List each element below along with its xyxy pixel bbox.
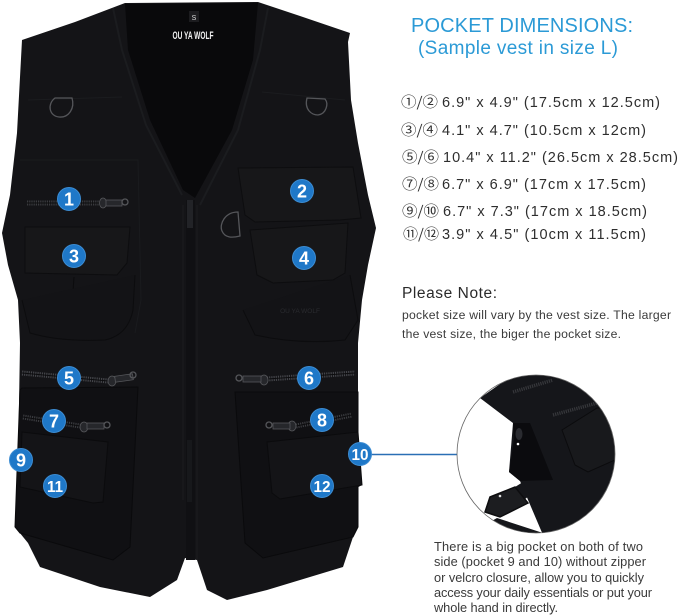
flap pocket 3 (25, 227, 130, 275)
side pocket description: There is a big pocket on both of two (434, 539, 643, 554)
size tag (189, 11, 199, 22)
zipper 6 (236, 373, 355, 385)
badge 8: 8 (317, 410, 327, 430)
row 5/6: ⑤/⑥ (402, 147, 439, 167)
inset zippers (513, 380, 597, 415)
note text: pocket size will vary by the vest size. The larger (402, 308, 671, 322)
row 3/4: 4.1" x 4.7" (10.5cm x 12cm) (442, 123, 646, 139)
flap pocket 12 (267, 432, 362, 499)
flap pocket 4 (250, 223, 348, 283)
row 1/2 (401, 92, 660, 112)
logo embroidery: OU YA WOLF (280, 308, 320, 315)
side pocket description: side (pocket 9 and 10) without zipper (434, 554, 647, 569)
flap pocket 11 (20, 432, 108, 503)
side pocket description: access your daily essentials or put your (434, 585, 653, 600)
row 9/10: 6.7" x 7.3" (17cm x 18.5cm) (443, 204, 647, 220)
collar band (113, 8, 268, 205)
badge 3: 3 (69, 246, 79, 266)
row 7/8 (402, 174, 646, 194)
vest body (2, 2, 376, 600)
pocket 3 pleat (70, 277, 74, 335)
zipper 8 (266, 415, 352, 431)
zipper 7 (23, 417, 110, 432)
row 11/12 (403, 224, 646, 244)
badge 4: 4 (299, 248, 309, 268)
row 1/2: ①/② (401, 92, 438, 112)
zipper 5 (22, 372, 136, 386)
badge 6: 6 (304, 368, 314, 388)
size tag: S (192, 15, 197, 22)
badge 12: 12 (314, 479, 331, 496)
badge 7 (42, 410, 66, 432)
badge 12 (310, 474, 334, 498)
center zipper (183, 200, 197, 560)
strap (493, 518, 542, 533)
phone in pocket (509, 423, 553, 481)
D-ring center (221, 212, 240, 237)
row 7/8: ⑦/⑧ (402, 174, 439, 194)
callout connector line (368, 454, 457, 456)
lower right pocket (235, 392, 358, 558)
title: POCKET DIMENSIONS: (411, 15, 633, 37)
please note heading: Please Note: (402, 285, 497, 302)
D-ring right (306, 98, 327, 115)
inner neck lining (125, 3, 258, 198)
badge 7: 7 (49, 412, 59, 432)
row 11/12: ⑪/⑫ (403, 224, 439, 244)
note text (402, 308, 671, 341)
badge 1: 1 (64, 190, 74, 210)
buckle (485, 487, 528, 517)
row 3/4 (401, 120, 646, 140)
phone camera (516, 428, 522, 440)
title (411, 15, 633, 59)
row 9/10: ⑨/⑩ (402, 201, 439, 221)
badge 6 (298, 366, 320, 390)
badge 1 (58, 188, 80, 210)
badge 5 (58, 366, 80, 390)
badge 3 (62, 244, 86, 268)
inset flap (562, 408, 620, 472)
shoulder yoke seams (28, 92, 345, 100)
badge 9 (10, 448, 32, 472)
flap pocket 2 (238, 167, 361, 222)
row 5/6 (402, 147, 678, 167)
number badges (10, 180, 372, 498)
badge 9: 9 (16, 450, 26, 470)
badge 10: 10 (352, 447, 369, 464)
badge 5: 5 (64, 368, 74, 388)
zipper 1 (27, 198, 128, 208)
title: (Sample vest in size L) (418, 38, 618, 59)
illustration: black vest (2, 2, 376, 600)
pocket dimensions list (401, 92, 678, 244)
badge 11 (44, 474, 66, 498)
row 11/12: 3.9" x 4.5" (10cm x 11.5cm) (442, 227, 646, 243)
right chest pocket bottom (243, 275, 358, 342)
side pocket description (433, 539, 653, 615)
inset circle: side pocket detail (457, 375, 620, 536)
left chest pocket bottom (22, 275, 135, 340)
badge 10 (348, 442, 372, 466)
row 7/8: 6.7" x 6.9" (17cm x 17.5cm) (442, 177, 646, 193)
badge 11: 11 (47, 479, 63, 496)
side pocket description: or velcro closure, allow you to quickly (434, 570, 645, 585)
badge 2 (290, 180, 314, 202)
row 1/2: 6.9" x 4.9" (17.5cm x 12.5cm) (442, 95, 660, 111)
badge 8 (310, 408, 334, 432)
row 9/10 (402, 201, 647, 221)
brand label: OU YA WOLF (172, 30, 214, 42)
row 5/6: 10.4" x 11.2" (26.5cm x 28.5cm) (443, 150, 678, 166)
left chest pocket panel (20, 160, 141, 333)
side pocket description: whole hand in directly. (433, 600, 558, 615)
note text: the vest size, the biger the pocket size. (402, 327, 621, 341)
lower left pocket (15, 387, 138, 560)
vest side panel (480, 375, 620, 535)
row 3/4: ③/④ (401, 120, 438, 140)
badge 4 (292, 246, 316, 270)
D-ring left (50, 98, 73, 117)
badge 2: 2 (297, 182, 307, 202)
